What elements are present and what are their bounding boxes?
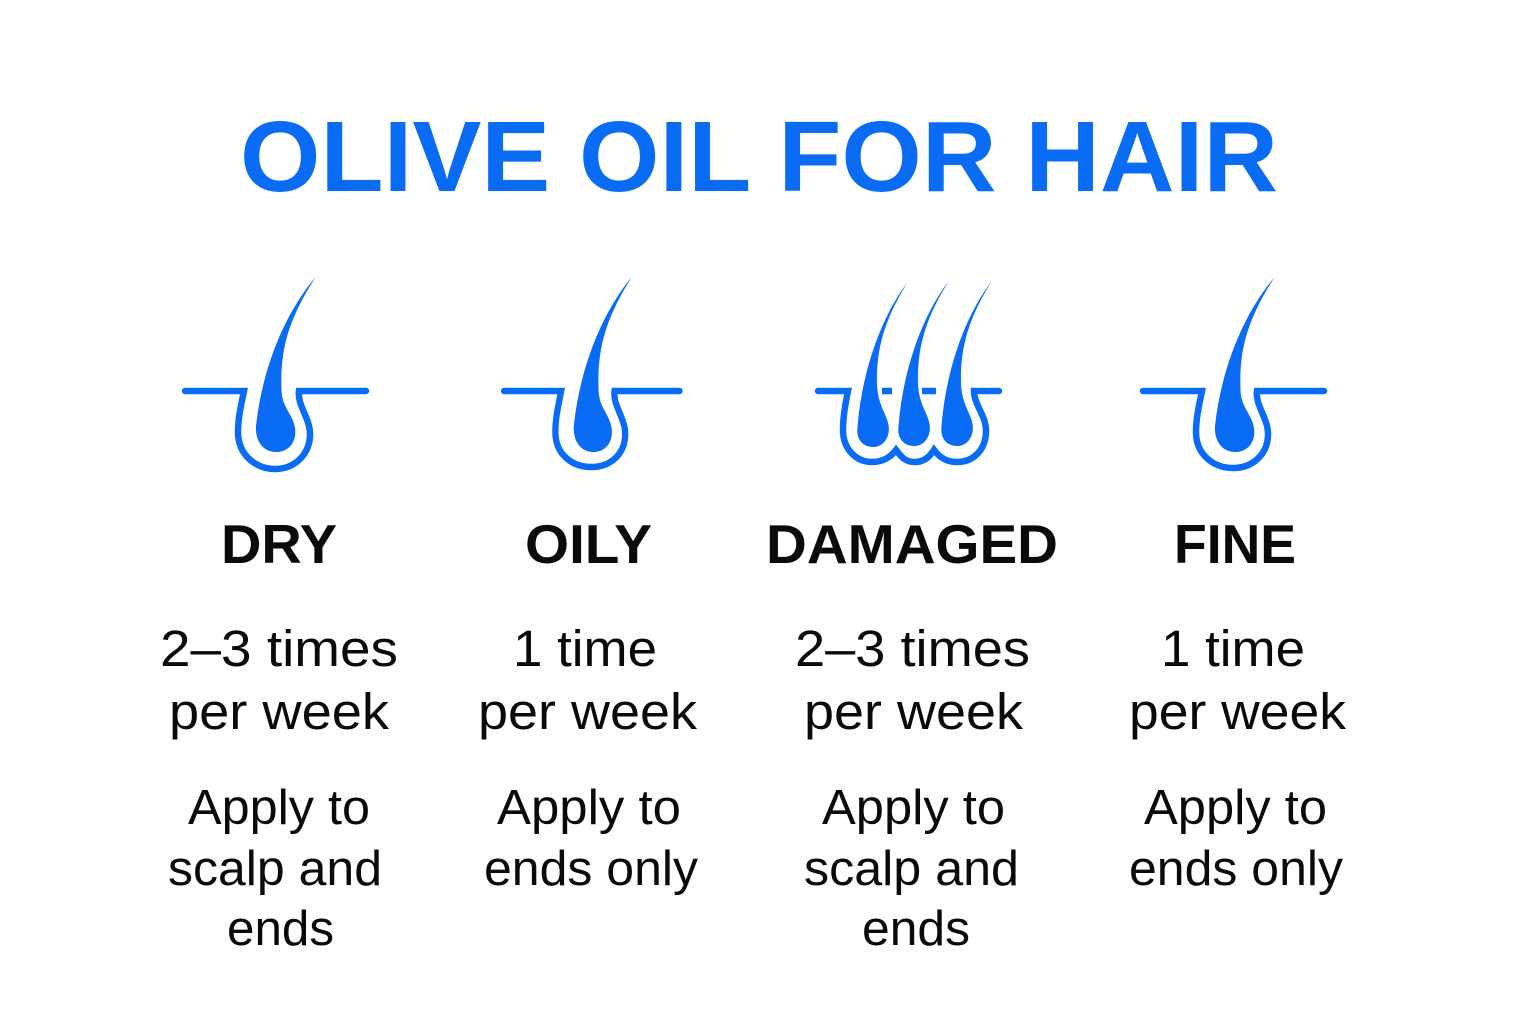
icon: single hair follicle, oily [504,277,680,467]
application: fine: Apply to [1144,781,1327,835]
frequency: oily [478,620,698,740]
heading: fine: FINE [1174,513,1296,575]
icon: single hair follicle, fine [1143,277,1324,468]
application: dry [168,781,382,956]
frequency: damaged: per week [804,683,1024,740]
panel: dry hair [160,277,398,956]
application: fine: ends only [1129,842,1344,896]
panel: oily hair [478,277,699,896]
application: fine [1129,781,1344,896]
application: dry: Apply to [188,781,370,835]
panel: damaged hair [766,281,1058,956]
icon: single hair follicle, dry [185,277,366,469]
panel: fine hair [1129,277,1347,896]
title: OLIVE OIL FOR HAIR [240,101,1278,213]
frequency: fine: per week [1129,683,1347,740]
application: damaged [804,781,1019,956]
heading: dry: DRY [221,513,337,575]
application: damaged: Apply to [822,781,1005,835]
application: oily [484,781,699,896]
frequency: damaged: 2–3 times [795,620,1030,677]
frequency: dry: per week [169,683,390,740]
icon: three hair follicles, damaged [818,281,999,462]
application: dry: ends [227,902,334,956]
frequency: damaged [795,620,1030,740]
frequency: oily: per week [478,683,698,740]
application: dry: scalp and [168,842,382,896]
frequency: fine [1129,620,1347,740]
application: oily: Apply to [497,781,681,835]
frequency: dry [160,620,398,740]
frequency: oily: 1 time [513,620,657,677]
heading: oily: OILY [525,513,652,575]
application: damaged: scalp and [804,842,1019,896]
application: damaged: ends [862,902,970,956]
frequency: fine: 1 time [1161,620,1305,677]
heading: damaged: DAMAGED [766,513,1058,575]
application: oily: ends only [484,842,699,896]
frequency: dry: 2–3 times [160,620,398,677]
